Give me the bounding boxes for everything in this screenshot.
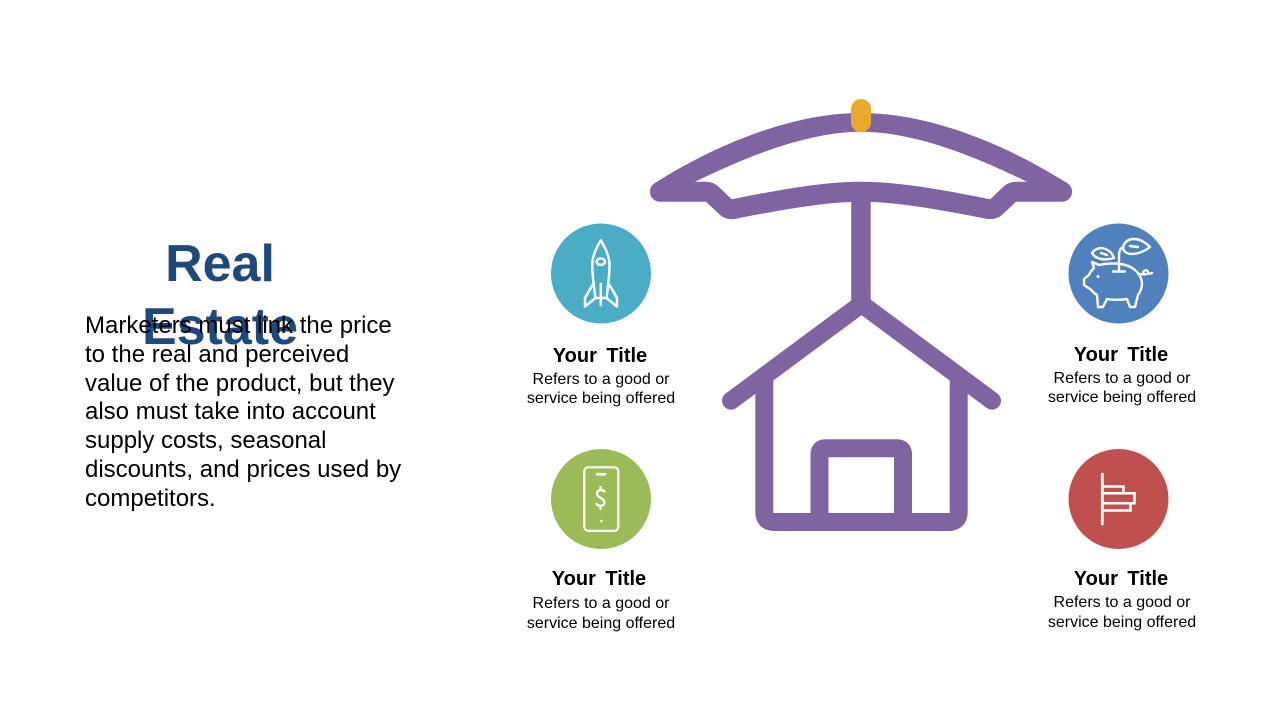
panel: top left [527,224,675,407]
body text: Marketers must link the price [85,312,392,339]
description: service being offered [1048,389,1196,406]
title: Real [165,235,275,293]
body text: supply costs, seasonal [85,427,326,454]
body text [85,312,401,512]
panel: bottom right [1048,449,1196,630]
umbrella canopy [650,113,1072,219]
description [1048,594,1196,630]
description [1048,370,1196,406]
body text: value of the product, but they [85,370,395,397]
umbrella pole [851,192,871,306]
description: Refers to a good or [1054,370,1190,386]
body text: competitors. [85,485,216,512]
title [142,235,298,356]
description: Refers to a good or [533,595,669,612]
description: service being offered [1048,614,1196,630]
description [527,595,675,632]
house door [820,448,903,522]
house walls [764,378,959,522]
body text: also must take into account [85,398,376,425]
icon: rocket [551,224,651,324]
panel: bottom left [527,449,675,632]
description: Refers to a good or [1054,594,1190,611]
panel: top right [1048,224,1196,406]
heading: Your Title [552,568,646,590]
description: service being offered [527,614,675,632]
description: service being offered [527,390,675,407]
central illustration: umbrella over house [650,99,1072,531]
heading: Your Title [553,345,647,367]
house [731,304,992,522]
icon: phone with dollar [551,449,651,549]
house roof [731,304,992,401]
body text: discounts, and prices used by [85,456,401,483]
heading: Your Title [1074,344,1168,366]
description [527,370,675,407]
body text: to the real and perceived [85,341,349,368]
umbrella tip [851,99,871,132]
description: Refers to a good or [533,370,669,388]
title: Estate [142,298,298,356]
icon: piggy bank with sprout [1068,224,1168,324]
heading: Your Title [1074,568,1168,590]
icon: horizontal bar chart [1068,449,1168,549]
